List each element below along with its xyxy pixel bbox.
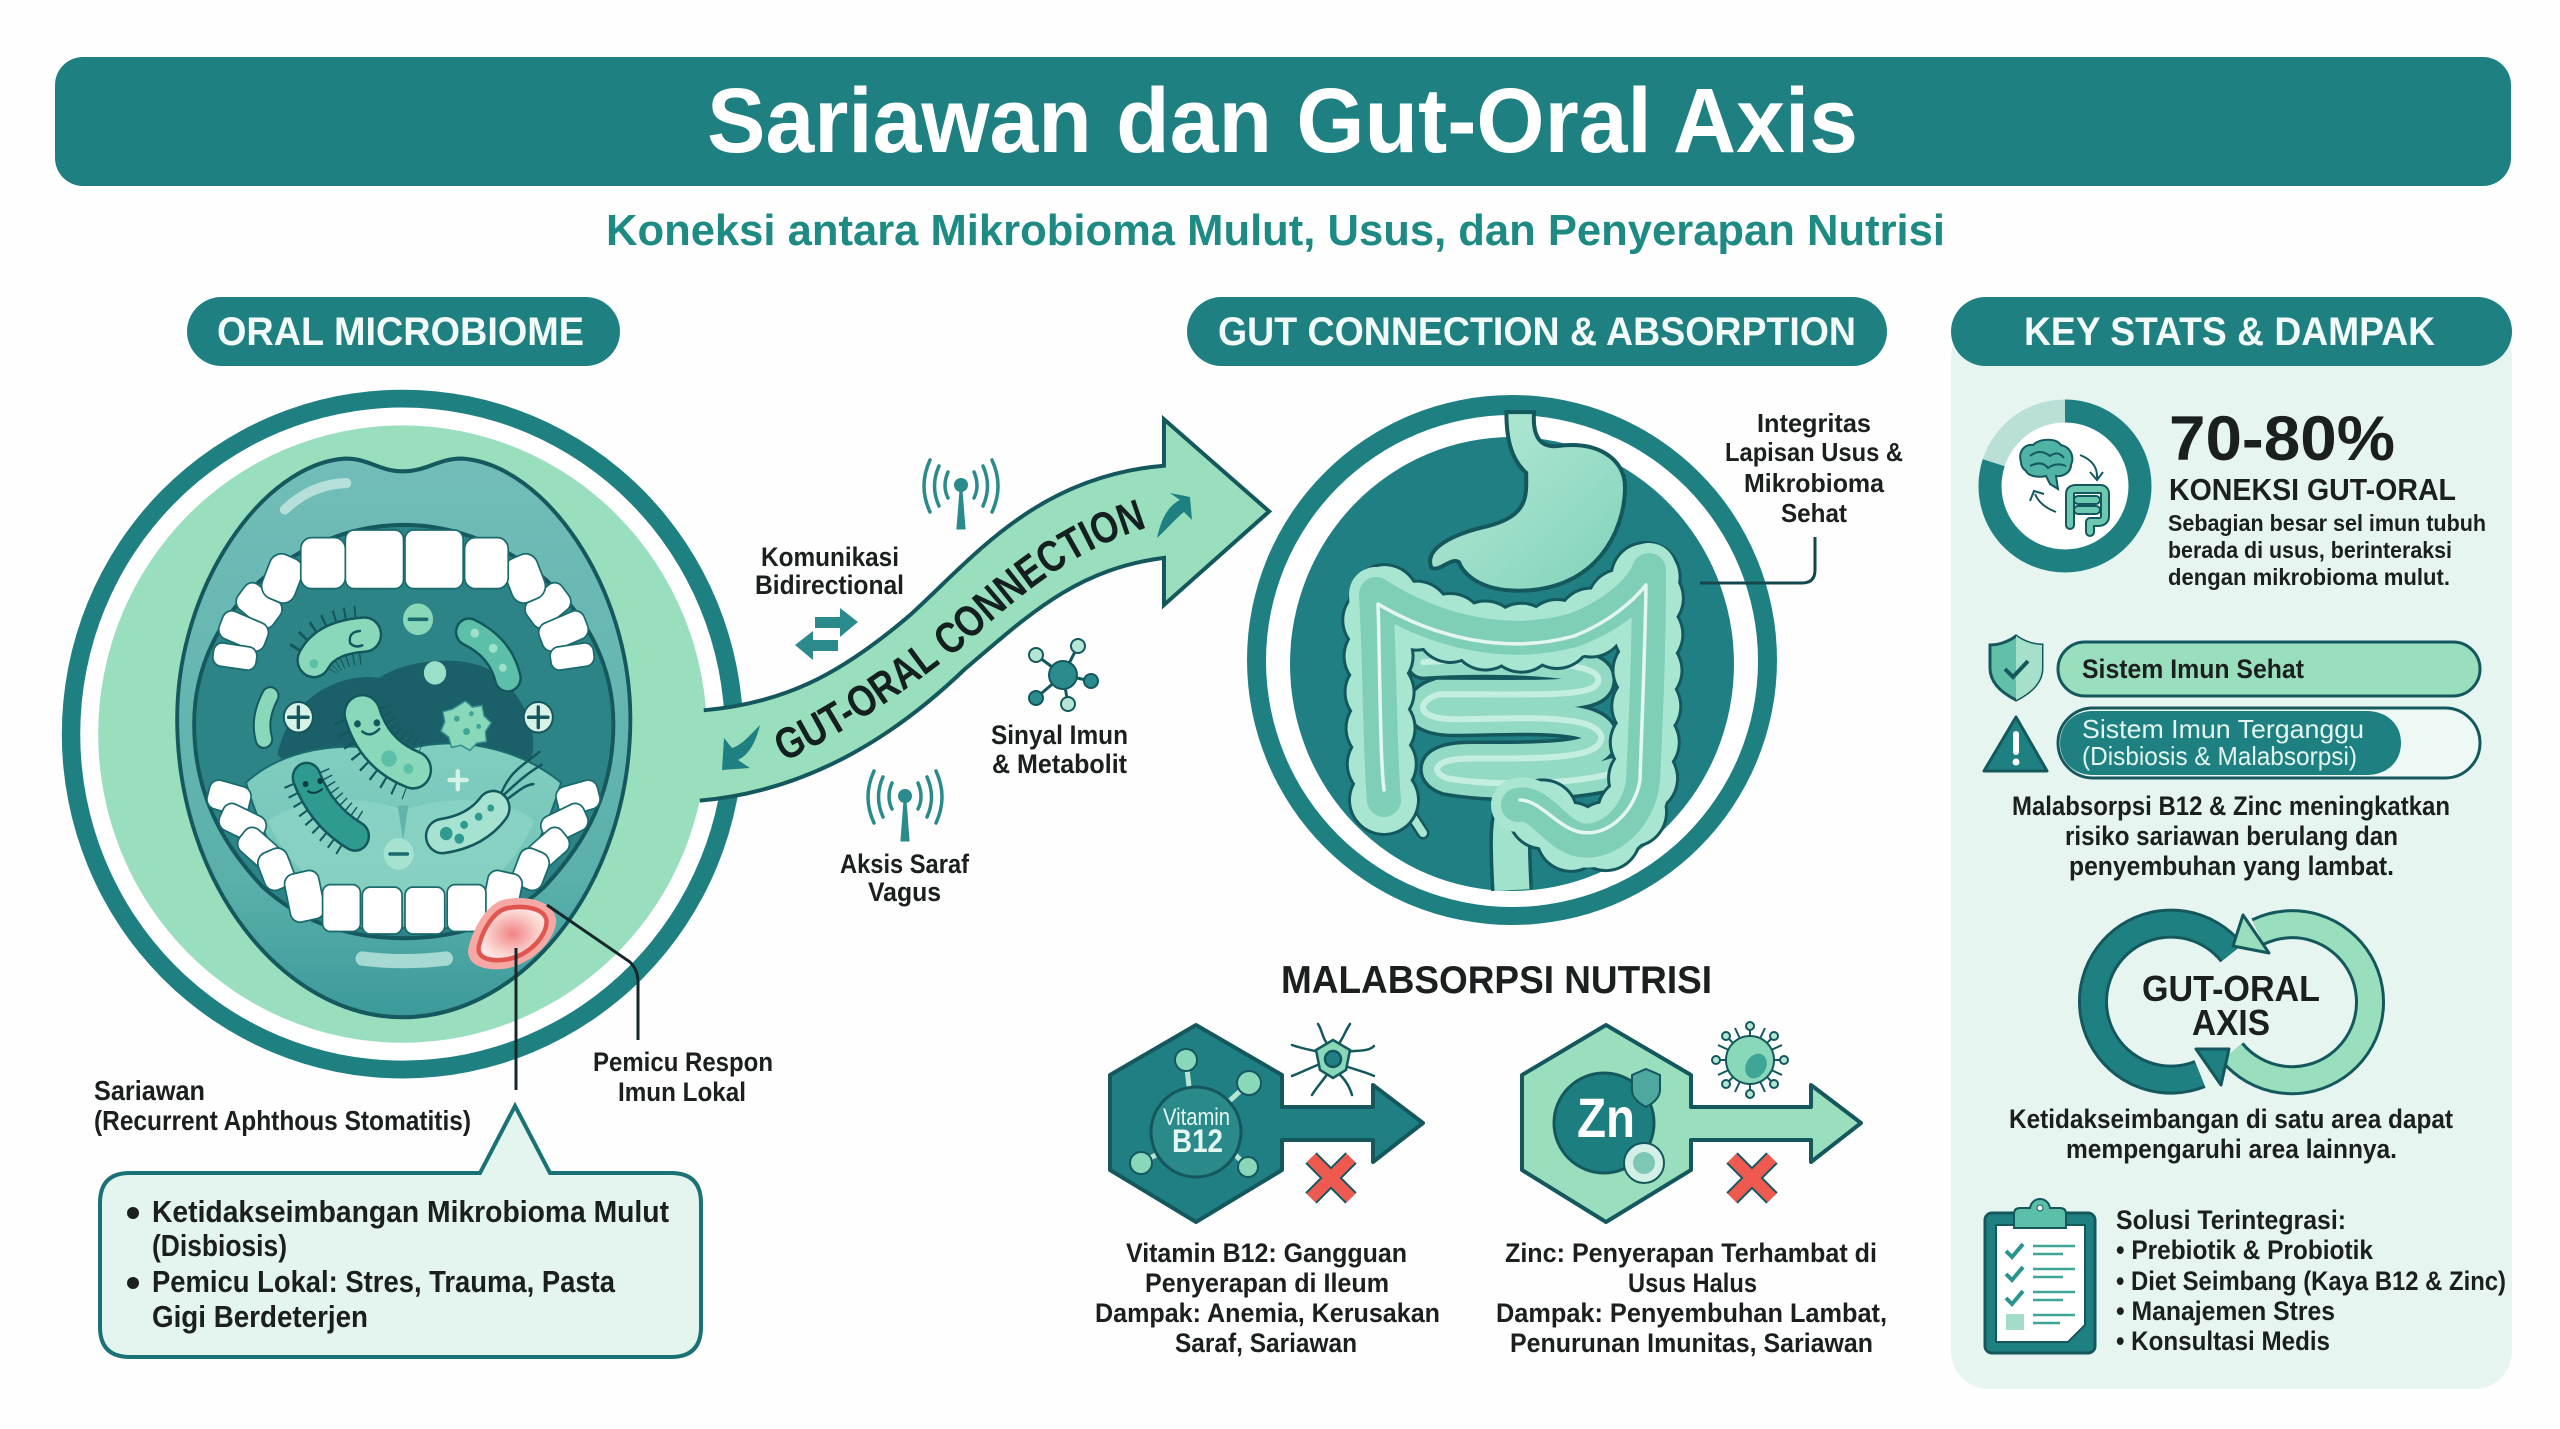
icon: gut <box>2070 489 2105 532</box>
stat description <box>2168 510 2486 590</box>
donut chart: 70-80 percent <box>1990 411 2140 561</box>
text: solusi terintegrasi: • Manajemen Stres <box>2116 1296 2335 1326</box>
icon: brain <box>2020 440 2072 489</box>
text: vitamin b12 effects: Dampak: Anemia, Kerusakan <box>1095 1298 1440 1328</box>
label: sariawan: (Recurrent Aphthous Stomatitis) <box>94 1105 471 1136</box>
label: aksis saraf vagus: Aksis Saraf <box>840 849 970 879</box>
icon: gut-oral axis loop <box>2093 915 2370 1085</box>
text: vitamin b12 effects: Saraf, Sariawan <box>1175 1328 1357 1358</box>
icon: vitamin b12 hexagon arrow: Vitamin <box>1163 1104 1230 1131</box>
sign: plus right <box>524 702 553 733</box>
icon: bidirectional arrows <box>795 608 858 660</box>
title banner: Sariawan dan Gut-Oral Axis <box>707 70 1858 172</box>
bacterium: lower left dark <box>303 777 355 836</box>
text: vitamin b12 effects: Vitamin B12: Gangguan <box>1126 1238 1407 1268</box>
mouth interior <box>194 525 613 938</box>
icon: red x right <box>1732 1158 1772 1198</box>
text: malabsorpsi risk: penyembuhan yang lambat. <box>2069 851 2394 881</box>
bar: sistem imun terganggu: Sistem Imun Terganggu <box>2082 714 2364 744</box>
callout: causes: (Disbiosis) <box>152 1228 287 1263</box>
text: zinc effects <box>1496 1238 1887 1358</box>
text: zinc effects: Zinc: Penyerapan Terhambat di <box>1505 1238 1877 1268</box>
icon: signal antenna top <box>924 460 998 528</box>
label: pemicu respon <box>593 1047 773 1107</box>
label: sinyal imun <box>991 720 1128 779</box>
band label: GUT-ORAL CONNECTION <box>776 500 1145 758</box>
bar: sistem imun terganggu: (Disbiosis & Malabsorpsi) <box>2082 741 2357 771</box>
text: solusi terintegrasi: • Prebiotik & Probiotik <box>2116 1235 2374 1265</box>
label: komunikasi bidirectional: Bidirectional <box>755 570 904 600</box>
icon: gut-oral axis loop: GUT-ORAL <box>2142 968 2320 1009</box>
label: sinyal imun: & Metabolit <box>992 749 1127 779</box>
label: integritas lapisan usus: Mikrobioma <box>1744 468 1885 498</box>
icon: zinc hexagon arrow <box>1522 1025 1861 1222</box>
heading: key stats: KEY STATS & DAMPAK <box>2024 310 2435 354</box>
heading: oral microbiome: ORAL MICROBIOME <box>217 310 584 354</box>
band arrow right <box>1157 493 1192 538</box>
heading: key stats <box>1951 297 2512 366</box>
label: komunikasi bidirectional: Komunikasi <box>761 542 899 572</box>
illustration: open mouth with microbiome <box>62 390 743 1078</box>
text: zinc effects: Dampak: Penyembuhan Lambat, <box>1496 1298 1887 1328</box>
callout: causes: Ketidakseimbangan Mikrobioma Mulut <box>152 1194 669 1229</box>
stomach <box>1430 412 1625 591</box>
text: zinc effects: Penurunan Imunitas, Sariawan <box>1510 1328 1873 1358</box>
text: vitamin b12 effects: Penyerapan di Ileum <box>1145 1268 1389 1298</box>
bacterium: top right <box>469 628 508 678</box>
label: sariawan <box>94 1075 471 1136</box>
label: sinyal imun: Sinyal Imun <box>991 720 1128 750</box>
bar: sistem imun terganggu <box>2058 708 2480 778</box>
text: solusi terintegrasi: • Konsultasi Medis <box>2116 1326 2330 1356</box>
label: integritas lapisan usus: Integritas <box>1757 408 1871 438</box>
microbe: star blob <box>441 701 491 750</box>
callout: causes <box>100 1106 701 1357</box>
lips <box>177 459 630 1017</box>
heading: malabsorpsi nutrisi: MALABSORPSI NUTRISI <box>1281 959 1712 1002</box>
band arrow left <box>722 725 760 770</box>
callout: causes: Pemicu Lokal: Stres, Trauma, Pasta <box>152 1264 616 1299</box>
bacterium: small left <box>262 696 270 739</box>
large intestine <box>1376 570 1649 841</box>
arrow: gut-oral connection band <box>700 415 1272 803</box>
bacterium: lower right with flagella <box>440 752 542 844</box>
throat <box>278 661 533 770</box>
tongue <box>246 743 561 928</box>
label: komunikasi bidirectional <box>755 542 904 600</box>
heading: gut connection: GUT CONNECTION & ABSORPTION <box>1218 310 1856 354</box>
stat: 70-80 percent: 70-80% <box>2169 404 2395 474</box>
icon: signal antenna bottom <box>868 771 942 840</box>
label: aksis saraf vagus: Vagus <box>868 877 941 907</box>
text: imbalance note: mempengaruhi area lainnya. <box>2066 1134 2397 1164</box>
bacterium: center smiling <box>354 714 413 774</box>
panel: key stats background <box>1951 320 2512 1389</box>
canker sore <box>468 898 556 969</box>
icon: vitamin b12 hexagon arrow <box>1110 1025 1423 1222</box>
subtitle: Koneksi antara Mikrobioma Mulut, Usus, dan Penyerapan Nutrisi <box>606 206 1945 255</box>
text: solusi terintegrasi: Solusi Terintegrasi: <box>2116 1205 2346 1235</box>
label: pemicu respon: Imun Lokal <box>618 1077 746 1107</box>
label: integritas lapisan usus: Lapisan Usus & <box>1725 437 1903 467</box>
lower teeth <box>205 778 602 934</box>
upper teeth <box>212 530 595 671</box>
heading: gut connection <box>1187 297 1887 366</box>
sign: minus <box>403 603 433 635</box>
rectum <box>1510 805 1518 890</box>
label: aksis saraf vagus <box>840 849 970 907</box>
text: solusi terintegrasi <box>2116 1205 2506 1356</box>
text: vitamin b12 effects <box>1095 1238 1440 1358</box>
sign: plus left <box>284 702 313 733</box>
stat description: Sebagian besar sel imun tubuh <box>2168 510 2486 536</box>
bar: sistem imun sehat <box>2058 642 2480 696</box>
label: pemicu respon: Pemicu Respon <box>593 1047 773 1077</box>
icon: gut-oral axis loop: AXIS <box>2192 1002 2270 1043</box>
sign: small plus <box>450 771 467 789</box>
text: malabsorpsi risk: Malabsorpsi B12 & Zinc meningkatkan <box>2012 791 2450 821</box>
leader lines: sore <box>516 905 638 1090</box>
text: imbalance note <box>2009 1104 2453 1164</box>
icon: molecule network <box>1029 639 1098 711</box>
heading: oral microbiome <box>187 297 620 366</box>
sign: minus lower <box>384 838 414 870</box>
label: sariawan: Sariawan <box>94 1075 205 1106</box>
text: zinc effects: Usus Halus <box>1628 1268 1757 1298</box>
label: integritas lapisan usus: Sehat <box>1781 498 1847 528</box>
text: solusi terintegrasi: • Diet Seimbang (Kaya B12 & Zinc) <box>2116 1266 2506 1296</box>
small intestine <box>1423 660 1613 783</box>
icon: virus <box>1712 1022 1788 1098</box>
icon: warning triangle <box>1984 717 2047 771</box>
stat description: berada di usus, berinteraksi <box>2168 537 2452 563</box>
microbe: dot <box>424 661 446 685</box>
title banner <box>55 57 2511 186</box>
icon: neuron <box>1292 1024 1374 1095</box>
leader line: integritas <box>1700 537 1815 583</box>
text: imbalance note: Ketidakseimbangan di satu area dapat <box>2009 1104 2453 1134</box>
bacterium: top left <box>309 631 365 668</box>
bar: sistem imun sehat: Sistem Imun Sehat <box>2082 654 2304 684</box>
stat label: KONEKSI GUT-ORAL <box>2169 472 2456 507</box>
icon: shield check <box>1990 636 2042 700</box>
callout: causes: Gigi Berdeterjen <box>152 1299 368 1334</box>
text: malabsorpsi risk <box>2012 791 2450 881</box>
illustration: digestive tract circle <box>1247 395 1777 925</box>
icon: red x left <box>1311 1158 1351 1198</box>
icon: vitamin b12 hexagon arrow: B12 <box>1172 1123 1223 1159</box>
text: malabsorpsi risk: risiko sariawan berulang dan <box>2065 821 2398 851</box>
appendix <box>1395 790 1423 833</box>
label: integritas lapisan usus <box>1725 408 1903 528</box>
icon: clipboard checklist <box>1985 1199 2095 1353</box>
stat description: dengan mikrobioma mulut. <box>2168 564 2450 590</box>
icon: cycle arrows <box>2030 455 2103 512</box>
icon: zinc hexagon arrow: Zn <box>1577 1086 1635 1149</box>
